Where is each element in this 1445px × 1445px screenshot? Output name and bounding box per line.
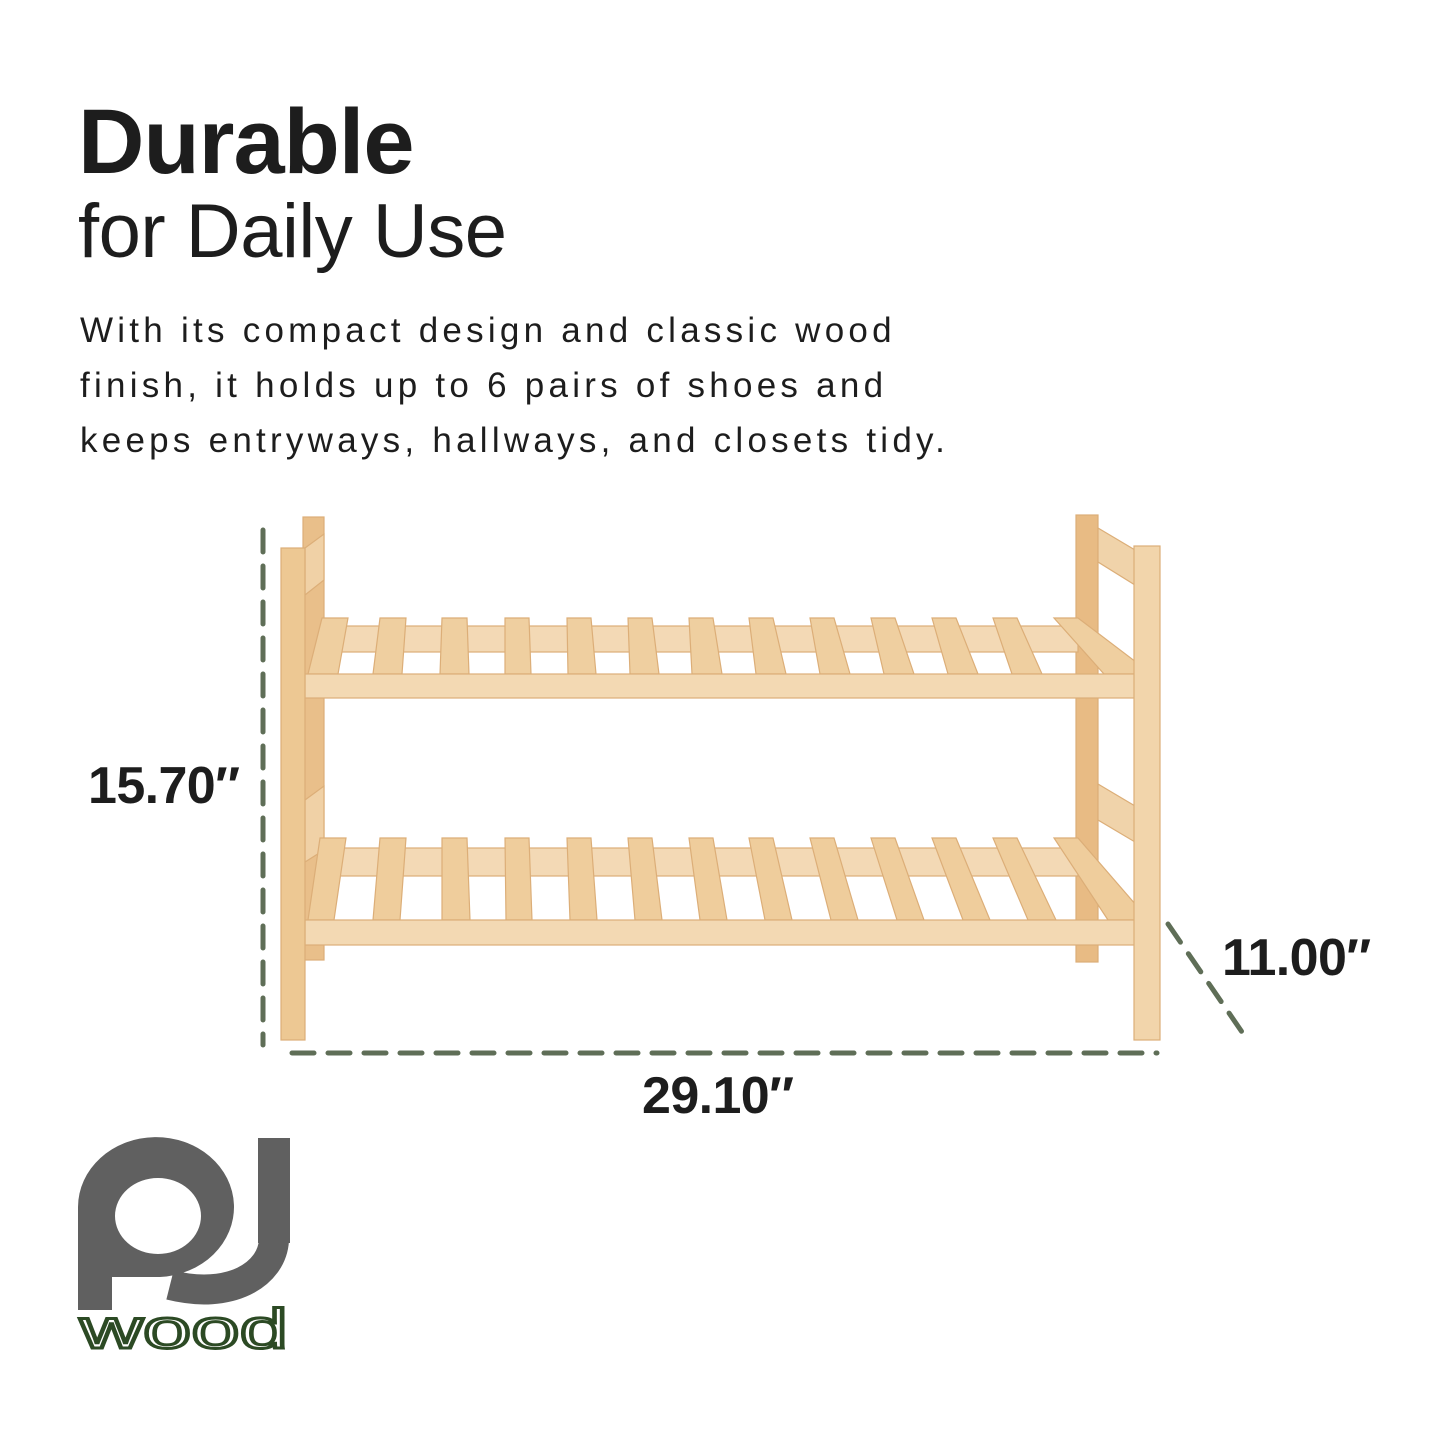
dimension label: height: 15.70″ [88, 757, 239, 815]
front posts [281, 548, 305, 1040]
logo j hook [170, 1240, 274, 1289]
logo word wood: wood [78, 1297, 288, 1360]
description text: keeps entryways, hallways, and closets tidy. [80, 421, 949, 460]
side rails [305, 534, 324, 595]
dimension label: depth: 11.00″ [1222, 929, 1371, 987]
dimension lines [263, 530, 1242, 1053]
logo letters pj [78, 1137, 290, 1310]
subtitle: for Daily Use [78, 189, 506, 274]
back posts [303, 517, 324, 960]
upper front rail [305, 674, 1137, 698]
description text: With its compact design and classic wood [80, 311, 896, 350]
description text: finish, it holds up to 6 pairs of shoes and [80, 366, 887, 405]
lower slats [308, 838, 1136, 920]
dimension label: width: 29.10″ [642, 1067, 793, 1125]
shoe rack [281, 515, 1160, 1040]
logo: pj wood [76, 1137, 290, 1360]
description text [80, 311, 949, 460]
title: Durable [78, 91, 414, 193]
upper slats [308, 618, 1136, 674]
lower back rail [322, 848, 1078, 876]
upper back rail [322, 626, 1078, 652]
lower front rail [305, 920, 1137, 945]
